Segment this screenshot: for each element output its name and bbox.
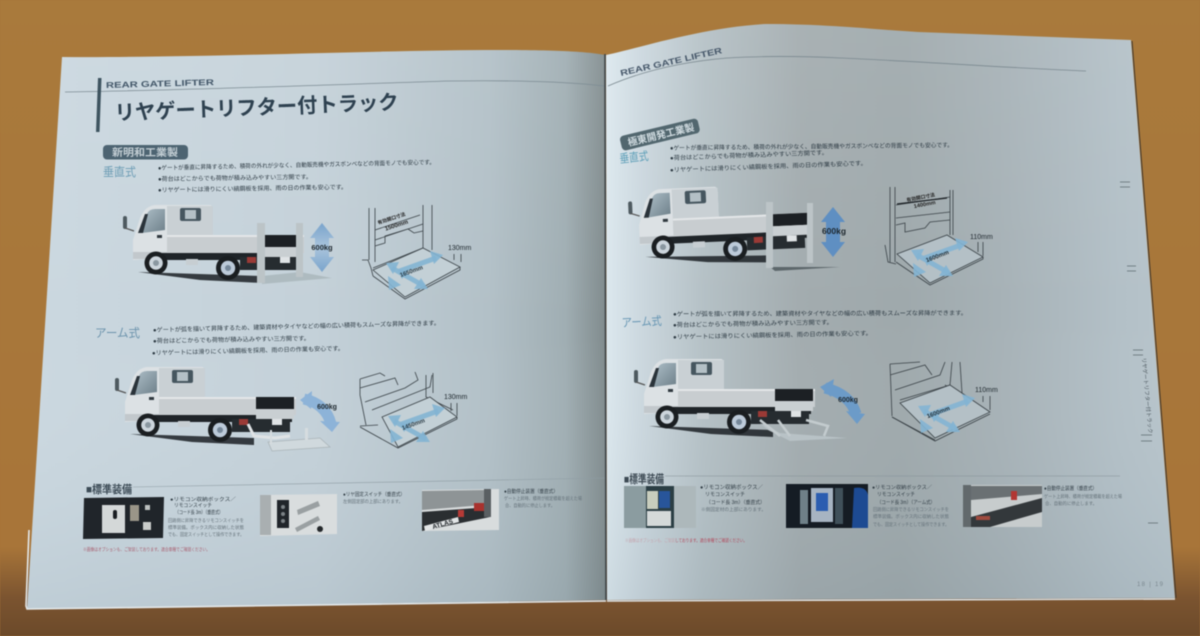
diagram: arm lifter dimensions: 1600mm — [926, 406, 951, 420]
text: automatic stop device — [1044, 485, 1122, 507]
text: remote control box, arm type: 回路側に昇降できるリモコンスイッチを — [873, 506, 949, 513]
diagram: vertical lifter dimensions: 130mm — [448, 245, 472, 252]
heading: arm type: アーム式 — [621, 314, 662, 330]
diagram: vertical lifter dimensions — [362, 205, 472, 299]
bullet list: vertical type: ●ゲートが垂直に昇降するため、積荷の外れが少なく、自動販売機やガスボンベなどの背面モノでも安心です。 — [158, 158, 435, 172]
text: automatic stop device: ゲート上昇時、積荷が規定積載を超えた場 — [1044, 493, 1122, 500]
diagram: vertical lifter dimensions: 1400mm — [913, 200, 936, 210]
text: automatic stop device: ゲート上昇時、積荷が規定積載を超えた場 — [504, 495, 582, 502]
text: remote control box, vertical type: （コード長 3m）（垂直式） — [706, 499, 765, 506]
bullet list: arm type: ●荷台はどこからでも荷物が積み込みやすい三方開です。 — [673, 318, 833, 329]
page number: 18 | 19 — [1137, 582, 1164, 588]
panel: right page — [606, 24, 1176, 601]
section heading: standard equipment: ■標準装備 — [624, 472, 664, 486]
section heading: standard equipment: ■標準装備 — [86, 482, 132, 496]
text: remote control box, arm type: でも、固定スイッチとして操作できます。 — [873, 521, 949, 528]
bullet list: arm type: ●リヤゲートには滑りにくい縞鋼板を採用、雨の日の作業も安心です。 — [673, 329, 872, 341]
text: automatic stop device: ●自動停止装置（垂直式） — [1044, 485, 1097, 492]
text: remote control box, arm type: ●リモコン収納ボックス／ — [872, 484, 932, 491]
diagram: vertical lifter dimensions: 110mm — [970, 234, 993, 241]
diagram: vertical lifter dimensions: 1500mm — [384, 219, 409, 233]
text: remote control box, vertical type: リモコンスイッチ — [705, 492, 745, 498]
footnote: right page — [625, 537, 747, 544]
arrow: 600kg vertical lift — [821, 207, 846, 257]
text: rear fixed switch — [343, 491, 405, 505]
photo: remote control box, arm type — [786, 484, 868, 528]
header accent bar — [96, 78, 102, 132]
arrow: 600kg vertical lift: 600kg — [311, 243, 333, 252]
text: remote control box: 標準装備。ボックス内に収納した状態 — [168, 524, 244, 531]
text: remote control box: （コード長 3m）（垂直式） — [175, 509, 223, 516]
title: リヤゲートリフター付トラック — [114, 91, 399, 125]
arrow: 600kg arm swing — [300, 391, 340, 432]
text: automatic stop device: ●自動停止装置（垂直式） — [504, 488, 558, 495]
diagram: vertical lifter dimensions: 1600mm — [925, 250, 950, 264]
text: automatic stop device — [504, 488, 582, 509]
text: remote control box, vertical type — [700, 483, 766, 513]
diagram: vertical lifter dimensions: 1650mm — [399, 265, 424, 279]
heading: vertical type: 垂直式 — [619, 148, 649, 166]
text: remote control box: リモコンスイッチ — [174, 503, 212, 509]
photo: rear fixed switch — [260, 494, 337, 536]
text: remote control box: 回路側に昇降できるリモコンスイッチを — [168, 517, 244, 524]
diagram: arm lifter dimensions: 130mm — [444, 394, 468, 401]
heading: arm type: アーム式 — [95, 326, 140, 340]
text: remote control box, arm type — [872, 484, 949, 528]
bullet list: vertical type: ●荷台はどこからでも荷物が積み込みやすい三方開です。 — [158, 173, 312, 183]
bullet list: vertical type — [158, 158, 435, 194]
footnote: right page: しております。適合車種でご確認ください。 — [675, 537, 747, 544]
text: remote control box: ●リモコン収納ボックス／ — [170, 496, 236, 503]
photo: automatic stop device — [422, 489, 499, 531]
panel: left page — [26, 50, 606, 609]
truck: arm lifter — [115, 367, 330, 451]
header: rear gate lifter label: REAR GATE LIFTER — [106, 77, 214, 90]
text: remote control box, vertical type: ※側固定材の上部にあります。 — [701, 506, 766, 513]
diagram: arm lifter dimensions — [360, 372, 468, 448]
bullet list: arm type — [673, 309, 967, 341]
text: rear fixed switch: ●リヤ固定スイッチ（垂直式） — [343, 491, 405, 498]
text: remote control box — [168, 496, 244, 538]
bullet list: vertical type: ●リヤゲートには滑りにくい縞鋼板を採用、雨の日の作業も安心です。 — [158, 183, 347, 194]
arrow: 600kg arm swing: 600kg — [838, 397, 858, 404]
arrow: 600kg vertical lift: 600kg — [822, 226, 846, 236]
photo: automatic stop device: ATLAS — [432, 518, 455, 531]
text: remote control box, arm type: リモコンスイッチ — [877, 492, 915, 498]
arrow: 600kg arm swing: 600kg — [317, 404, 337, 411]
diagram: vertical lifter dimensions — [885, 187, 993, 285]
bullet list: arm type: ●荷台はどこからでも荷物が積み込みやすい三方開です。 — [153, 334, 310, 345]
bullet list: vertical type: ●リヤゲートには滑りにくい縞鋼板を採用、雨の日の作業も安心です。 — [670, 159, 867, 174]
arrow: 600kg vertical lift — [310, 223, 334, 272]
maker badge: ShinMaywa: 新明和工業製 — [112, 146, 178, 159]
header: rear gate lifter label: REAR GATE LIFTER — [619, 45, 723, 78]
bullet list: arm type: ●リヤゲートには滑りにくい縞鋼板を採用、雨の日の作業も安心です。 — [152, 344, 344, 357]
diagram: arm lifter dimensions — [890, 362, 998, 441]
text: remote control box, vertical type: ●リモコン収納ボックス／ — [700, 483, 763, 491]
bullet list: arm type: ●ゲートが弧を描いて昇降するため、建築資材やタイヤなどの幅の広い積荷もスムーズな昇降ができます。 — [153, 319, 440, 334]
side index tabs: リヤゲートリフター付トラック — [1140, 357, 1155, 434]
text: automatic stop device: 合、自動的に停止します。 — [1045, 500, 1097, 507]
text: automatic stop device: 合、自動的に停止します。 — [505, 502, 555, 509]
photo: automatic stop device — [963, 485, 1042, 527]
footnote: right page: ※画像はオプションも、ご架装 — [625, 537, 675, 544]
text: rear fixed switch: 左側固定部の上部にあります。 — [343, 498, 403, 505]
truck: vertical lifter — [123, 205, 332, 284]
diagram: vertical lifter dimensions: 有効開口寸法 — [906, 191, 936, 204]
truck: arm lifter — [634, 359, 847, 441]
bullet list: arm type — [152, 319, 440, 357]
bullet list: vertical type — [670, 141, 953, 174]
footnote: left page: ※画像はオプションも、ご架装しております。適合車種でご確認ください。 — [83, 546, 210, 553]
photo: remote control box, vertical type — [624, 486, 696, 528]
maker badge: Kyokuto Kaihatsu: 極東開発工業製 — [626, 121, 696, 149]
photo: remote control box — [83, 497, 164, 539]
diagram: arm lifter dimensions: 1450mm — [401, 418, 426, 432]
bullet list: vertical type: ●ゲートが垂直に昇降するため、積荷の外れが少なく、自動販売機やガスボンベなどの背面モノでも安心です。 — [670, 141, 953, 152]
text: remote control box, arm type: 標準装備。ボックス内に収納した状態 — [873, 513, 949, 520]
bullet list: arm type: ●ゲートが弧を描いて昇降するため、建築資材やタイヤなどの幅の広い積荷もスムーズな昇降ができます。 — [673, 309, 967, 318]
book spine shadow — [605, 54, 606, 600]
heading: vertical type: 垂直式 — [103, 164, 136, 179]
diagram: arm lifter dimensions: 110mm — [975, 387, 998, 394]
diagram: vertical lifter dimensions: 有効開口寸法 — [377, 211, 406, 226]
text: remote control box: でも、固定スイッチとして操作できます。 — [168, 531, 244, 538]
maker badge: ShinMaywa — [103, 145, 188, 160]
truck: vertical lifter — [628, 183, 840, 271]
side index tabs — [1120, 182, 1158, 523]
arrow: 600kg arm swing — [820, 379, 865, 424]
text: remote control box, arm type: （コード長 3m）（アーム式） — [877, 499, 935, 506]
bullet list: vertical type: ●荷台はどこからでも荷物が積み込みやすい三方開です。 — [670, 148, 828, 162]
